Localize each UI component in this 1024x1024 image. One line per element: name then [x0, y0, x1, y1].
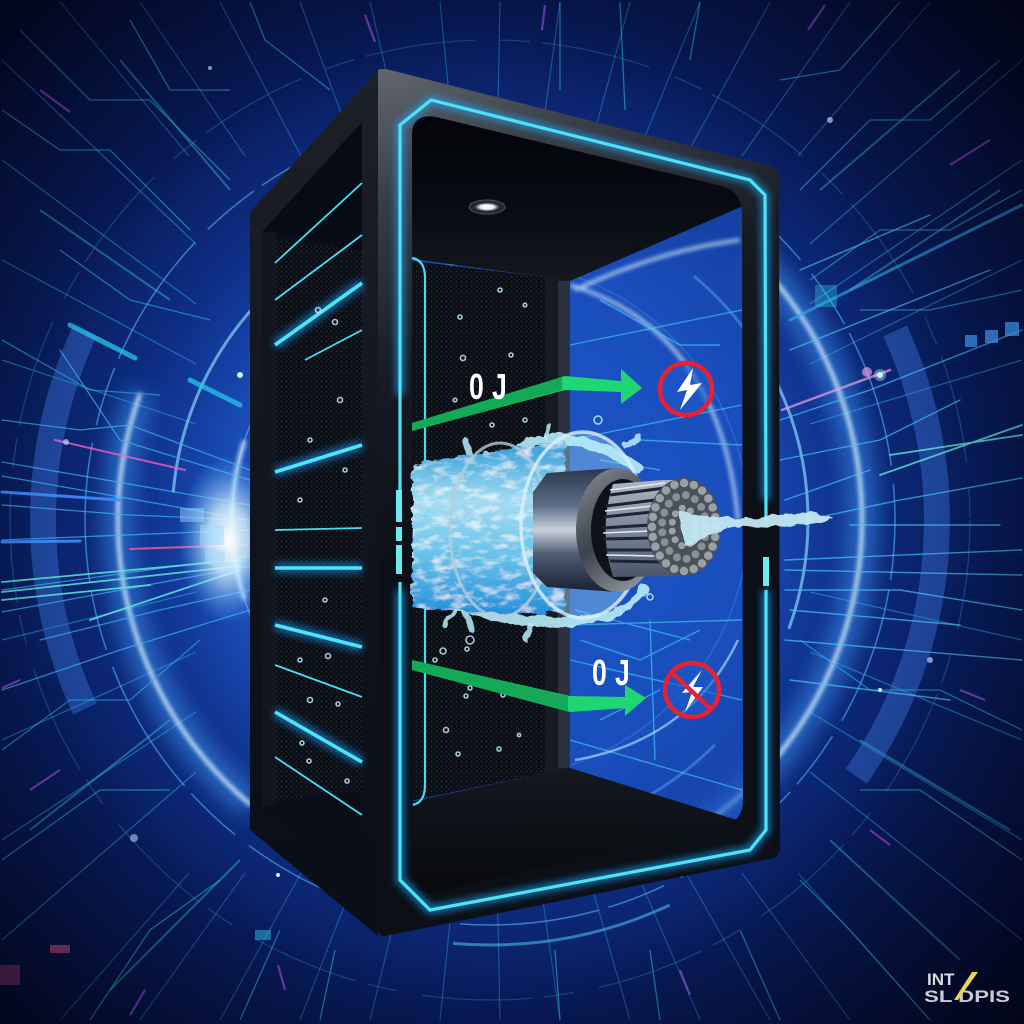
- front frame: [378, 69, 780, 936]
- side neon glow: [275, 283, 362, 762]
- inner vertical pillar: [545, 277, 570, 773]
- ceiling lamp: [469, 200, 505, 214]
- water column: [412, 442, 565, 614]
- lower zero energy indicator: [412, 652, 719, 717]
- water jet: [678, 510, 833, 545]
- translucent water inside ring: [521, 432, 645, 618]
- conductor strands: [603, 480, 685, 577]
- cable end face: [647, 478, 721, 576]
- water splash tendrils: [445, 425, 645, 640]
- logo: SL DPIS: [924, 987, 1010, 1006]
- flange: [576, 468, 658, 592]
- logo: INT: [927, 970, 955, 989]
- pixel blocks: [0, 285, 1019, 985]
- glass ring 1: [450, 443, 550, 617]
- droplets on back wall: [298, 288, 653, 783]
- ceiling: [405, 105, 750, 281]
- neon frame line: [400, 100, 766, 910]
- metal cable body: [533, 468, 617, 592]
- upper zero energy indicator: [412, 363, 712, 431]
- horizontal light streaks: [2, 205, 1022, 700]
- neon frame glow: [400, 100, 766, 910]
- inner cyan line: [412, 258, 425, 805]
- side neon lines: [275, 183, 362, 815]
- lower green arrow: [412, 660, 646, 716]
- upper green arrow: [412, 369, 642, 431]
- logo: [924, 970, 1010, 1006]
- glowing nodes: [63, 66, 933, 877]
- neon side bars: [396, 490, 769, 586]
- upper 0J label: 0J: [469, 366, 515, 407]
- flange opening: [591, 479, 655, 581]
- lower 0J label: 0J: [592, 652, 638, 693]
- glowing left core: [178, 455, 278, 625]
- cable with water: [298, 288, 833, 783]
- side panel: [250, 70, 378, 936]
- upper energy icon: [660, 363, 712, 415]
- perforated back wall: [405, 260, 545, 802]
- floor: [405, 768, 750, 900]
- lower no-energy icon: [665, 663, 719, 717]
- cabinet interior: back wall, ceiling, floor: [405, 105, 750, 900]
- cabinet: [250, 69, 780, 936]
- glass ring 2: [521, 432, 645, 618]
- right window glow: [570, 200, 745, 826]
